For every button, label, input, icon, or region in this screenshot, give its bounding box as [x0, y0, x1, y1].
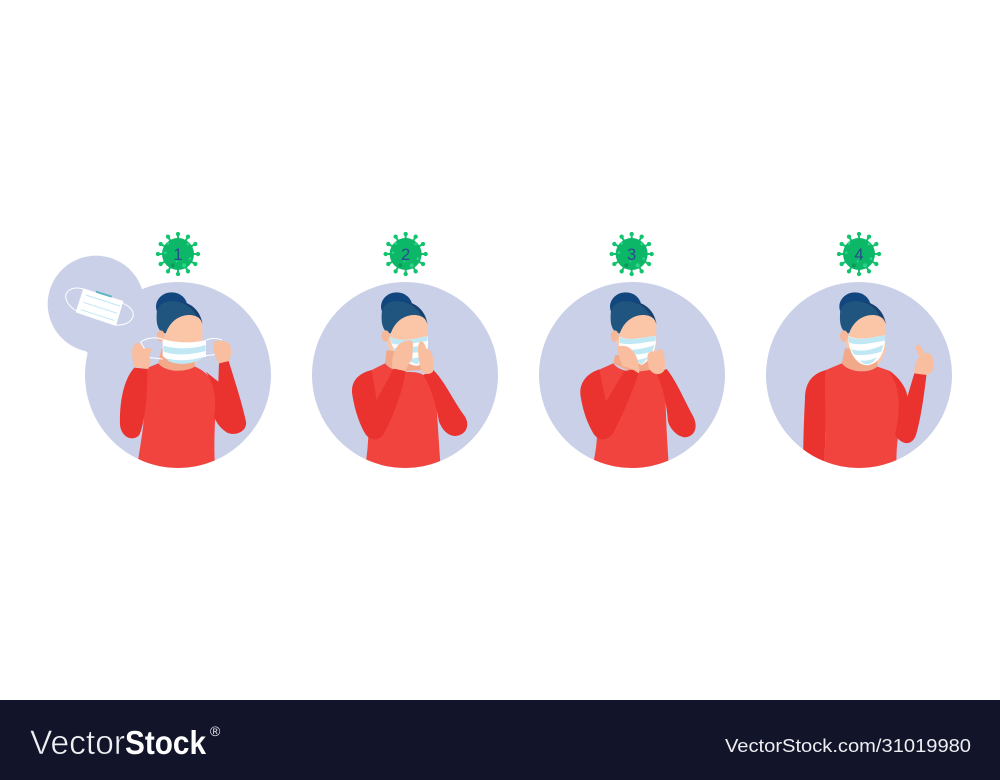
panel: step 4	[766, 232, 952, 472]
infographic canvas	[0, 232, 1000, 780]
panel: step 1	[48, 232, 271, 472]
badge 4	[837, 232, 881, 276]
badge 3: 3	[627, 245, 636, 264]
badge 2	[383, 232, 428, 276]
icon: loose mask	[66, 288, 133, 326]
background circle	[312, 282, 498, 468]
background circle with inset	[48, 256, 271, 468]
badge 1: 1	[173, 245, 183, 264]
badge 4: 4	[854, 245, 864, 264]
woman	[803, 292, 934, 472]
panel: step 3	[539, 232, 725, 472]
logo: VectorStock	[30, 723, 221, 762]
panel: step 2	[312, 232, 498, 472]
woman	[352, 292, 467, 472]
background circle	[766, 282, 952, 468]
image id text: VectorStock.com/31019980	[725, 736, 971, 756]
background circle	[539, 282, 725, 468]
woman	[120, 292, 246, 472]
logo: VectorStock: Stock	[125, 724, 207, 761]
footer bar	[0, 700, 1000, 780]
badge 1	[156, 232, 200, 276]
logo: VectorStock: ®	[210, 723, 221, 739]
badge 3	[609, 232, 654, 276]
logo: VectorStock: Vector	[30, 724, 125, 762]
badge 2: 2	[401, 245, 410, 264]
woman	[580, 292, 696, 472]
